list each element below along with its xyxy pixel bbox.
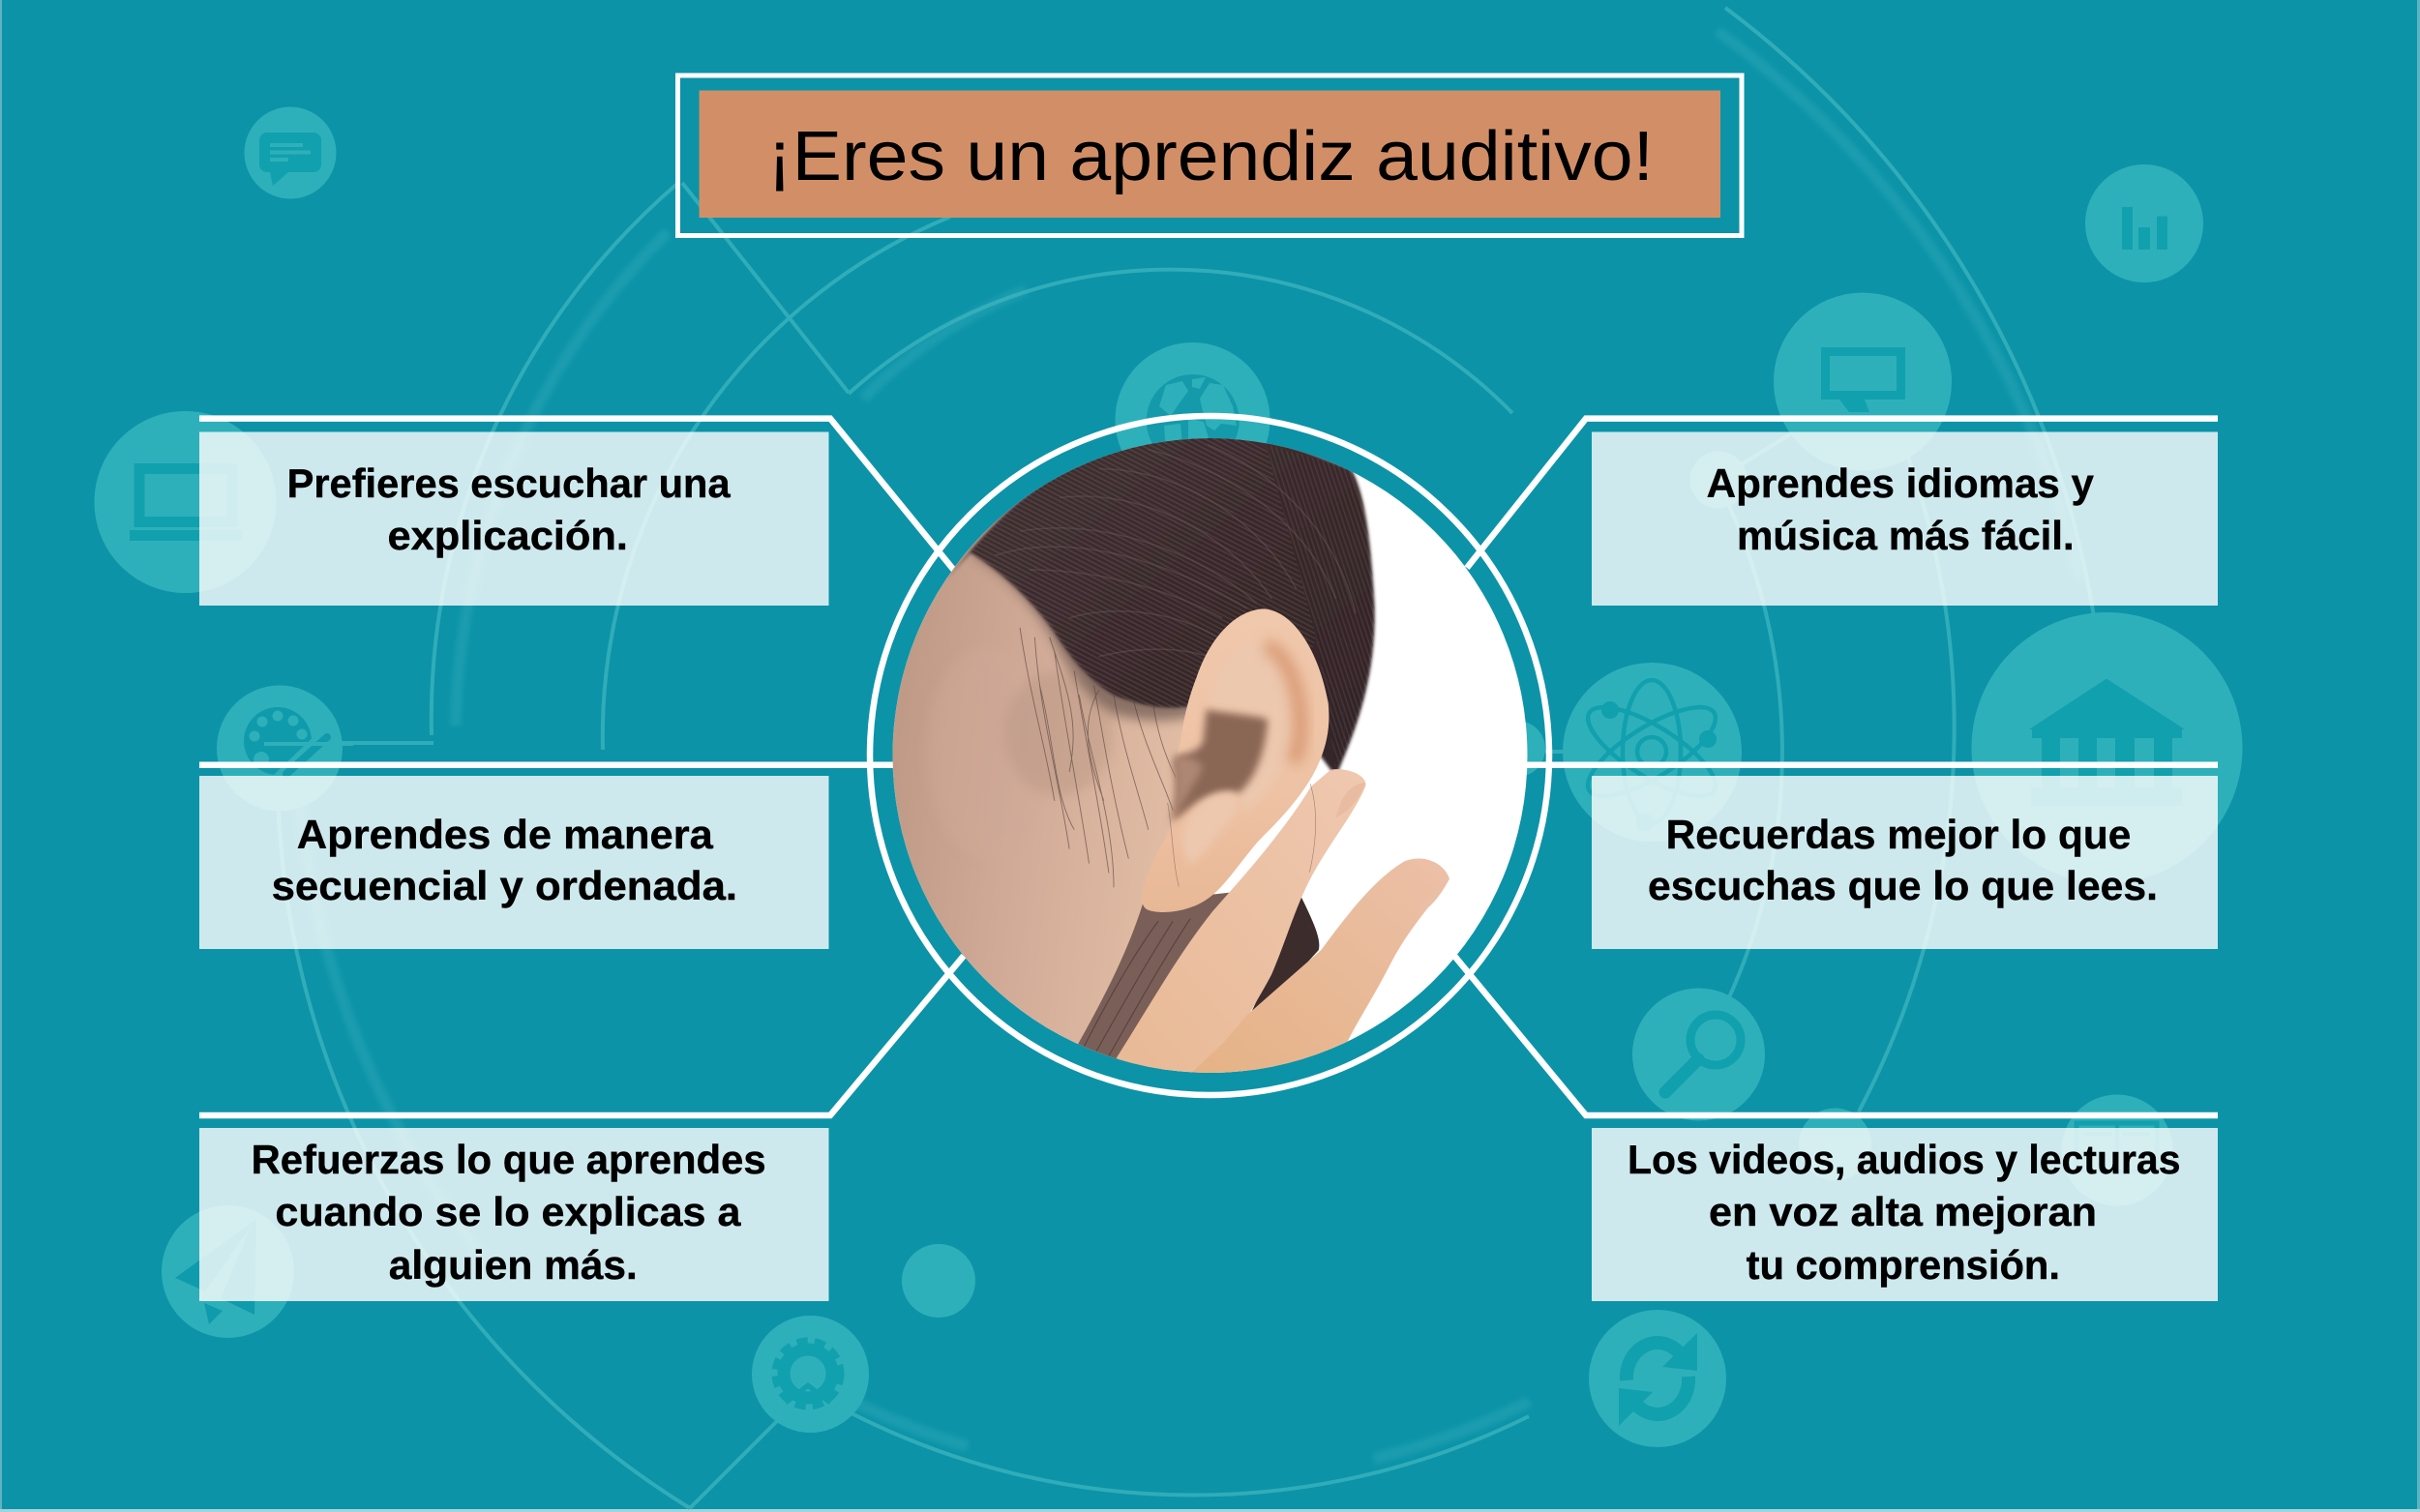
small node (1689, 451, 1748, 509)
icon: bar chart (2085, 164, 2203, 282)
panel: escuchar (199, 431, 828, 606)
text: videos: en voz alta mejoran (1709, 1189, 2097, 1234)
text: secuencial: Aprendes de manera (297, 812, 713, 857)
panel: videos (1592, 1128, 2218, 1301)
fly-away hairs (1168, 608, 1368, 887)
text: refuerzas: Refuerzas lo que aprendes (252, 1137, 766, 1182)
text: escuchar (287, 460, 731, 558)
text: videos (1628, 1137, 2181, 1288)
hair: behind hand (1252, 898, 1320, 1011)
dot (902, 1244, 975, 1318)
icon: chat bubble (244, 106, 337, 199)
icon: magnifier (1632, 989, 1765, 1120)
icon: gear (752, 1316, 869, 1433)
fingers (1117, 769, 1449, 1079)
text: recuerdas: escuchas que lo que lees. (1648, 863, 2158, 908)
icon: atom (1563, 663, 1742, 842)
title frame (677, 75, 1742, 236)
title: ¡Eres un aprendiz auditivo! (767, 118, 1654, 195)
text: recuerdas: Recuerdas mejor lo que (1666, 812, 2131, 857)
icon: globe (1115, 342, 1270, 497)
text: secuencial: secuencial y ordenada. (272, 863, 737, 908)
text: refuerzas: alguien más. (389, 1242, 638, 1288)
text: idiomas: Aprendes idiomas y (1707, 460, 2095, 506)
panel: secuencial (199, 776, 828, 949)
panel: idiomas (1592, 431, 2218, 606)
text: idiomas (1707, 460, 2095, 558)
hair: nape wisps (1020, 628, 1178, 887)
background arcs and connector lines (265, 8, 2106, 1508)
icon: laptop (95, 411, 277, 593)
text: videos: Los videos, audios y lecturas (1628, 1137, 2181, 1182)
text: escuchar: Prefieres escuchar una (287, 460, 731, 506)
text: refuerzas (252, 1137, 766, 1288)
central ring (870, 416, 1549, 1095)
icon: refresh (1589, 1310, 1726, 1447)
icon: paper plane (162, 1205, 294, 1338)
icon: book (2061, 1095, 2173, 1205)
title bar (700, 91, 1720, 218)
panel: refuerzas (199, 1128, 828, 1301)
text: escuchar: explicación. (387, 513, 628, 558)
text: secuencial (272, 812, 737, 908)
photo: ear with hand (892, 438, 1527, 1073)
hair: haze at hairline (970, 554, 1187, 727)
ear (1142, 608, 1368, 912)
hair: lower strands (1077, 892, 1232, 1080)
icon: palette (217, 685, 353, 811)
connector lines (199, 419, 2218, 1115)
icon: monitor (1774, 292, 1952, 470)
text: idiomas: música más fácil. (1737, 513, 2075, 558)
text: recuerdas (1648, 812, 2158, 908)
icon: building (1972, 612, 2243, 883)
small node bottom (1799, 1109, 1871, 1180)
skin: face and neck (892, 484, 1187, 1053)
panel: recuerdas (1592, 776, 2218, 949)
text: videos: tu comprensión. (1747, 1242, 2060, 1288)
hair: main (946, 416, 1375, 777)
text: refuerzas: cuando se lo explicas a (275, 1189, 741, 1234)
small node by ring (1489, 721, 1545, 777)
